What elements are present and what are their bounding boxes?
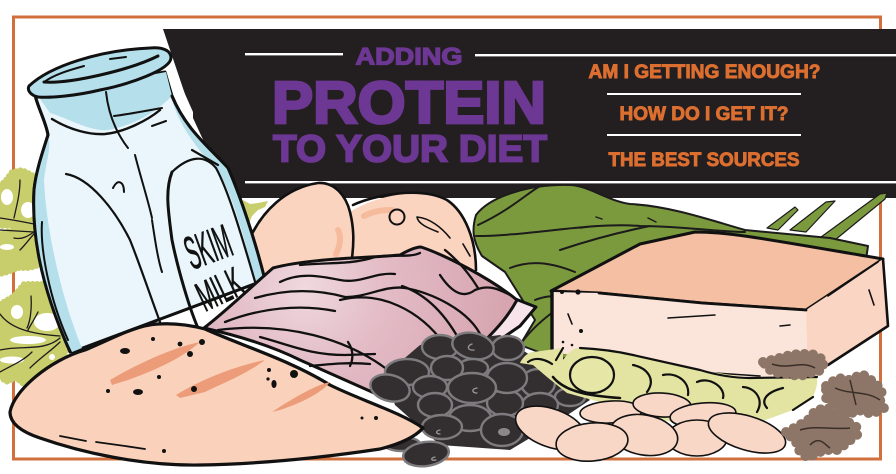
chicken shading: [336, 210, 392, 254]
jar inner lines: [42, 56, 256, 340]
black beans: [367, 329, 590, 469]
almonds: [510, 391, 790, 464]
jar rim: [28, 48, 171, 97]
walnut creases: [772, 364, 880, 448]
bean hilum spots: [498, 428, 510, 436]
label word: milk: MILK: [189, 258, 250, 320]
topic: am I getting enough: AM I GETTING ENOUGH?: [588, 62, 820, 83]
individual beans: [367, 329, 585, 469]
white sliver beside jar neck: [160, 58, 193, 124]
skim milk label: SKIM: [177, 214, 239, 279]
title block: [245, 44, 896, 183]
tuna white edge: [470, 295, 536, 348]
topic: the best sources: THE BEST SOURCES: [608, 150, 800, 171]
small parsley sprig: [240, 200, 268, 226]
topic dividers: [607, 93, 801, 136]
tofu top face: [551, 232, 883, 310]
tofu side face: [806, 259, 888, 385]
title: adding: ADDING: [356, 44, 462, 70]
tuna grain lines: [218, 250, 510, 380]
chicken breast: [10, 324, 423, 465]
skim milk label: [177, 214, 250, 320]
title: protein: PROTEIN: [272, 69, 546, 136]
chicken outlines: [250, 183, 476, 270]
peas: [553, 357, 783, 412]
tuna flesh: [204, 247, 517, 400]
black title banner: [163, 29, 896, 198]
topic: how do I get it: HOW DO I GET IT?: [620, 104, 788, 125]
topic list: [588, 62, 820, 171]
tofu block: [551, 232, 888, 385]
back chicken piece: [250, 183, 476, 290]
spinach stems: [767, 193, 887, 240]
milk jar: [28, 48, 265, 352]
jar blue edges: [34, 72, 265, 352]
grill marks: [110, 342, 330, 412]
peapod: [520, 348, 817, 430]
tofu front face: [552, 292, 808, 385]
tofu specks: [560, 289, 583, 346]
jar glass body: [34, 72, 265, 352]
parsley veins: [0, 180, 60, 372]
title rules: [245, 53, 896, 183]
chicken specks: [106, 337, 378, 453]
parsley behind jar: [0, 170, 66, 386]
chicken lines: [60, 436, 145, 449]
parsley holes: [0, 189, 60, 364]
jar outer edge redraw: [34, 95, 265, 352]
spinach leaves: [474, 185, 887, 360]
parsley leaves: [0, 170, 66, 386]
title: to your diet: TO YOUR DIET: [273, 128, 547, 170]
tuna steak: [204, 247, 536, 400]
bean marks: [432, 344, 477, 460]
walnuts: [763, 354, 884, 458]
bean pile base: [385, 335, 590, 450]
tofu lines: [552, 259, 888, 376]
pod outline: [528, 348, 817, 410]
